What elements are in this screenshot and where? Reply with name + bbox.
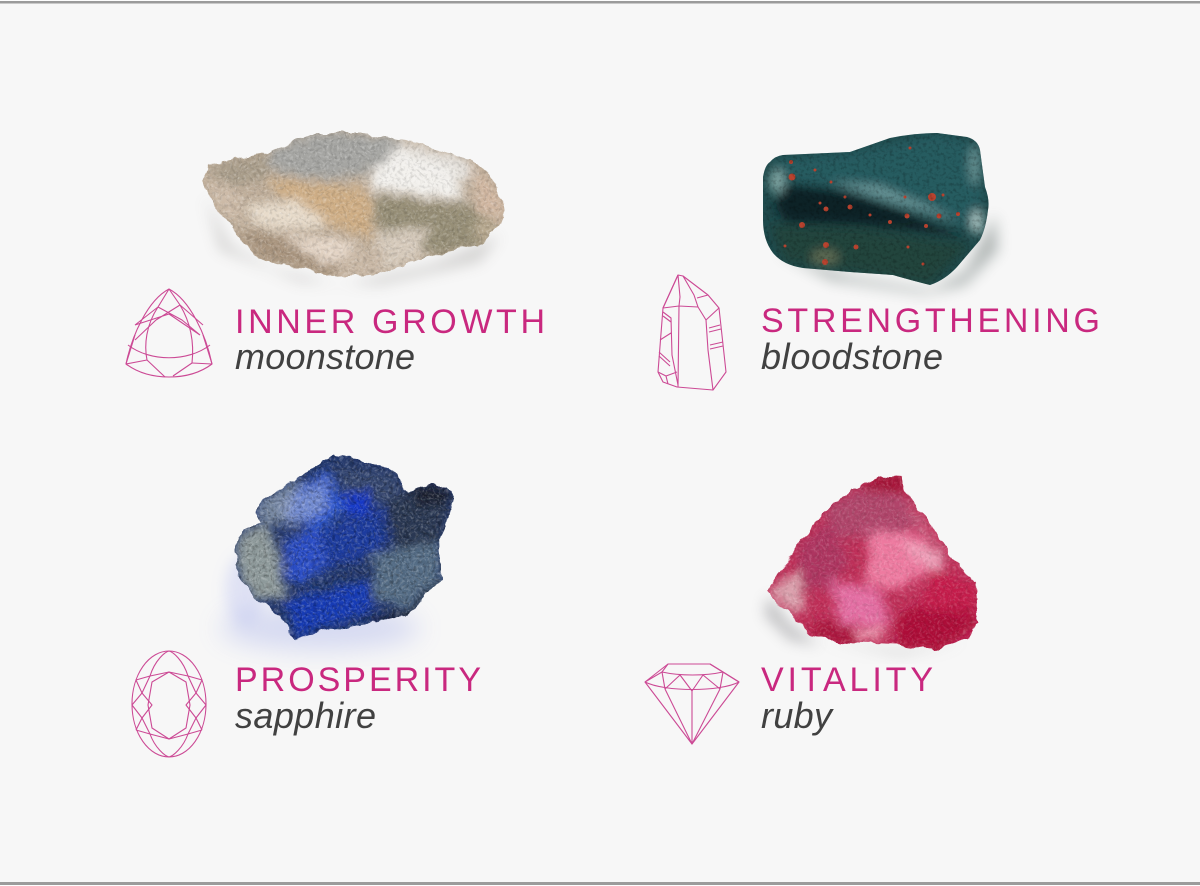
panel: prosperity: [132, 450, 481, 757]
heading: inner growth: INNER GROWTH: [235, 303, 545, 341]
icon: oval cut gem: [132, 651, 206, 757]
panel: vitality: [645, 470, 985, 744]
icon: trillion cut gem: [126, 289, 212, 377]
image: ruby: [760, 470, 985, 660]
label: ruby: ruby: [761, 695, 834, 736]
image: bloodstone: [755, 125, 998, 295]
heading: prosperity: PROSPERITY: [235, 661, 481, 699]
image: sapphire: [220, 450, 460, 650]
image: moonstone: [195, 125, 515, 285]
heading: vitality: VITALITY: [761, 661, 933, 699]
icon: crystal: [658, 275, 726, 390]
heading: strengthening: STRENGTHENING: [761, 302, 1100, 340]
label: moonstone: moonstone: [235, 336, 415, 377]
icon: brilliant diamond: [645, 664, 739, 744]
panel: strengthening: [658, 125, 1100, 390]
label: bloodstone: bloodstone: [761, 336, 943, 377]
label: sapphire: sapphire: [235, 695, 376, 736]
panel: inner growth: [126, 125, 545, 377]
